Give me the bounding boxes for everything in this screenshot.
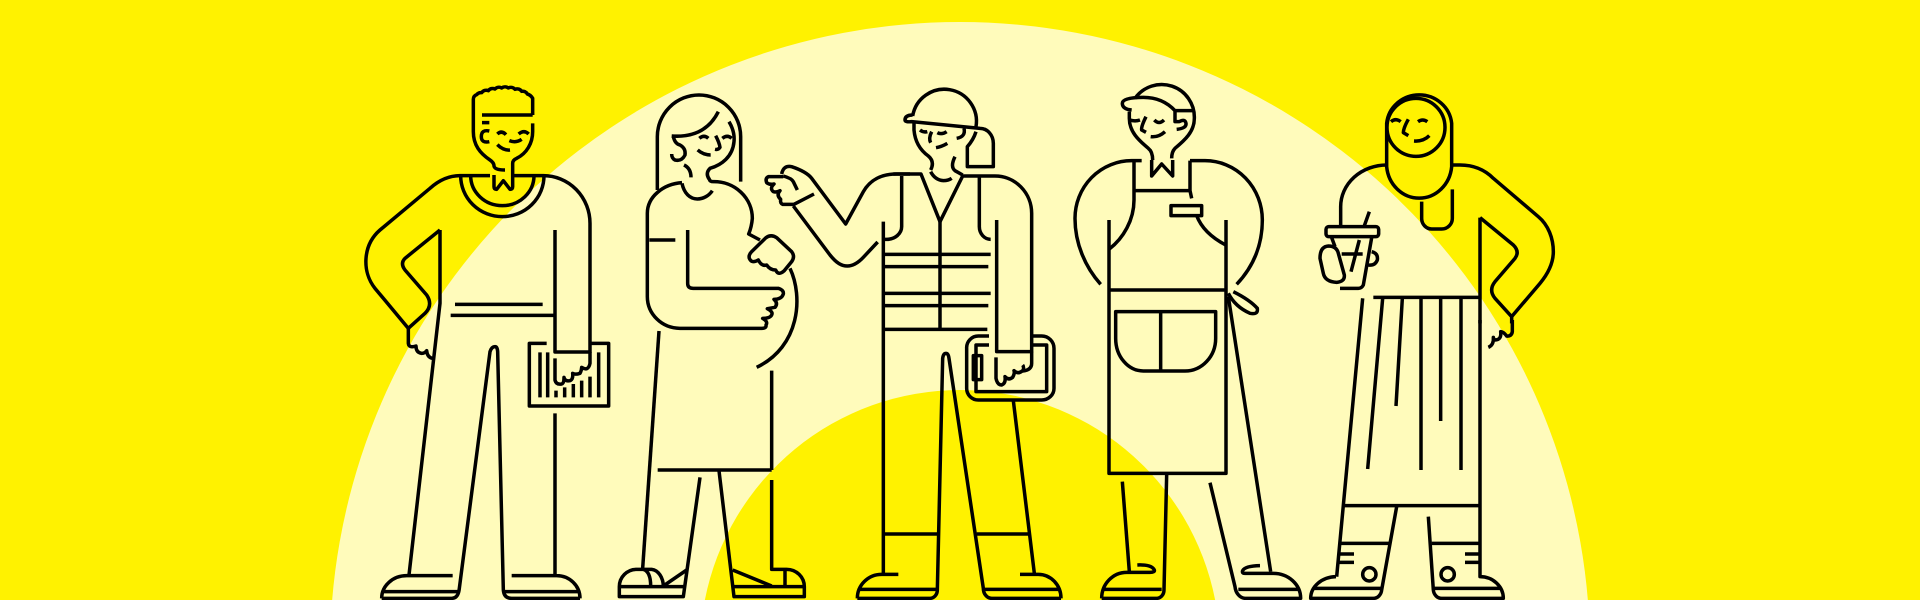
figure: pregnant woman (619, 95, 804, 597)
head, torso and cup (1320, 95, 1553, 577)
figure: man with clipboard (366, 87, 609, 598)
figure: barista in apron (1075, 85, 1301, 598)
skirt, legs and sandals (619, 331, 804, 597)
inner yellow arch (705, 390, 1215, 600)
head, vest and torso (883, 89, 1032, 573)
figure: woman in hijab with drink (1311, 95, 1553, 598)
figure: construction worker in hard hat (766, 89, 1061, 598)
hand, legs and boots (1311, 320, 1512, 598)
legs, boots, hand and toolbox (857, 336, 1061, 598)
legs and shoes (1102, 475, 1301, 598)
head and upper body (647, 95, 797, 367)
pointing arm and hand (766, 166, 910, 266)
head and upper body (366, 87, 590, 575)
large pale arch (332, 22, 1588, 600)
head, cap and apron (1075, 85, 1271, 572)
legs, shoes, hand and clipboard (382, 328, 609, 598)
